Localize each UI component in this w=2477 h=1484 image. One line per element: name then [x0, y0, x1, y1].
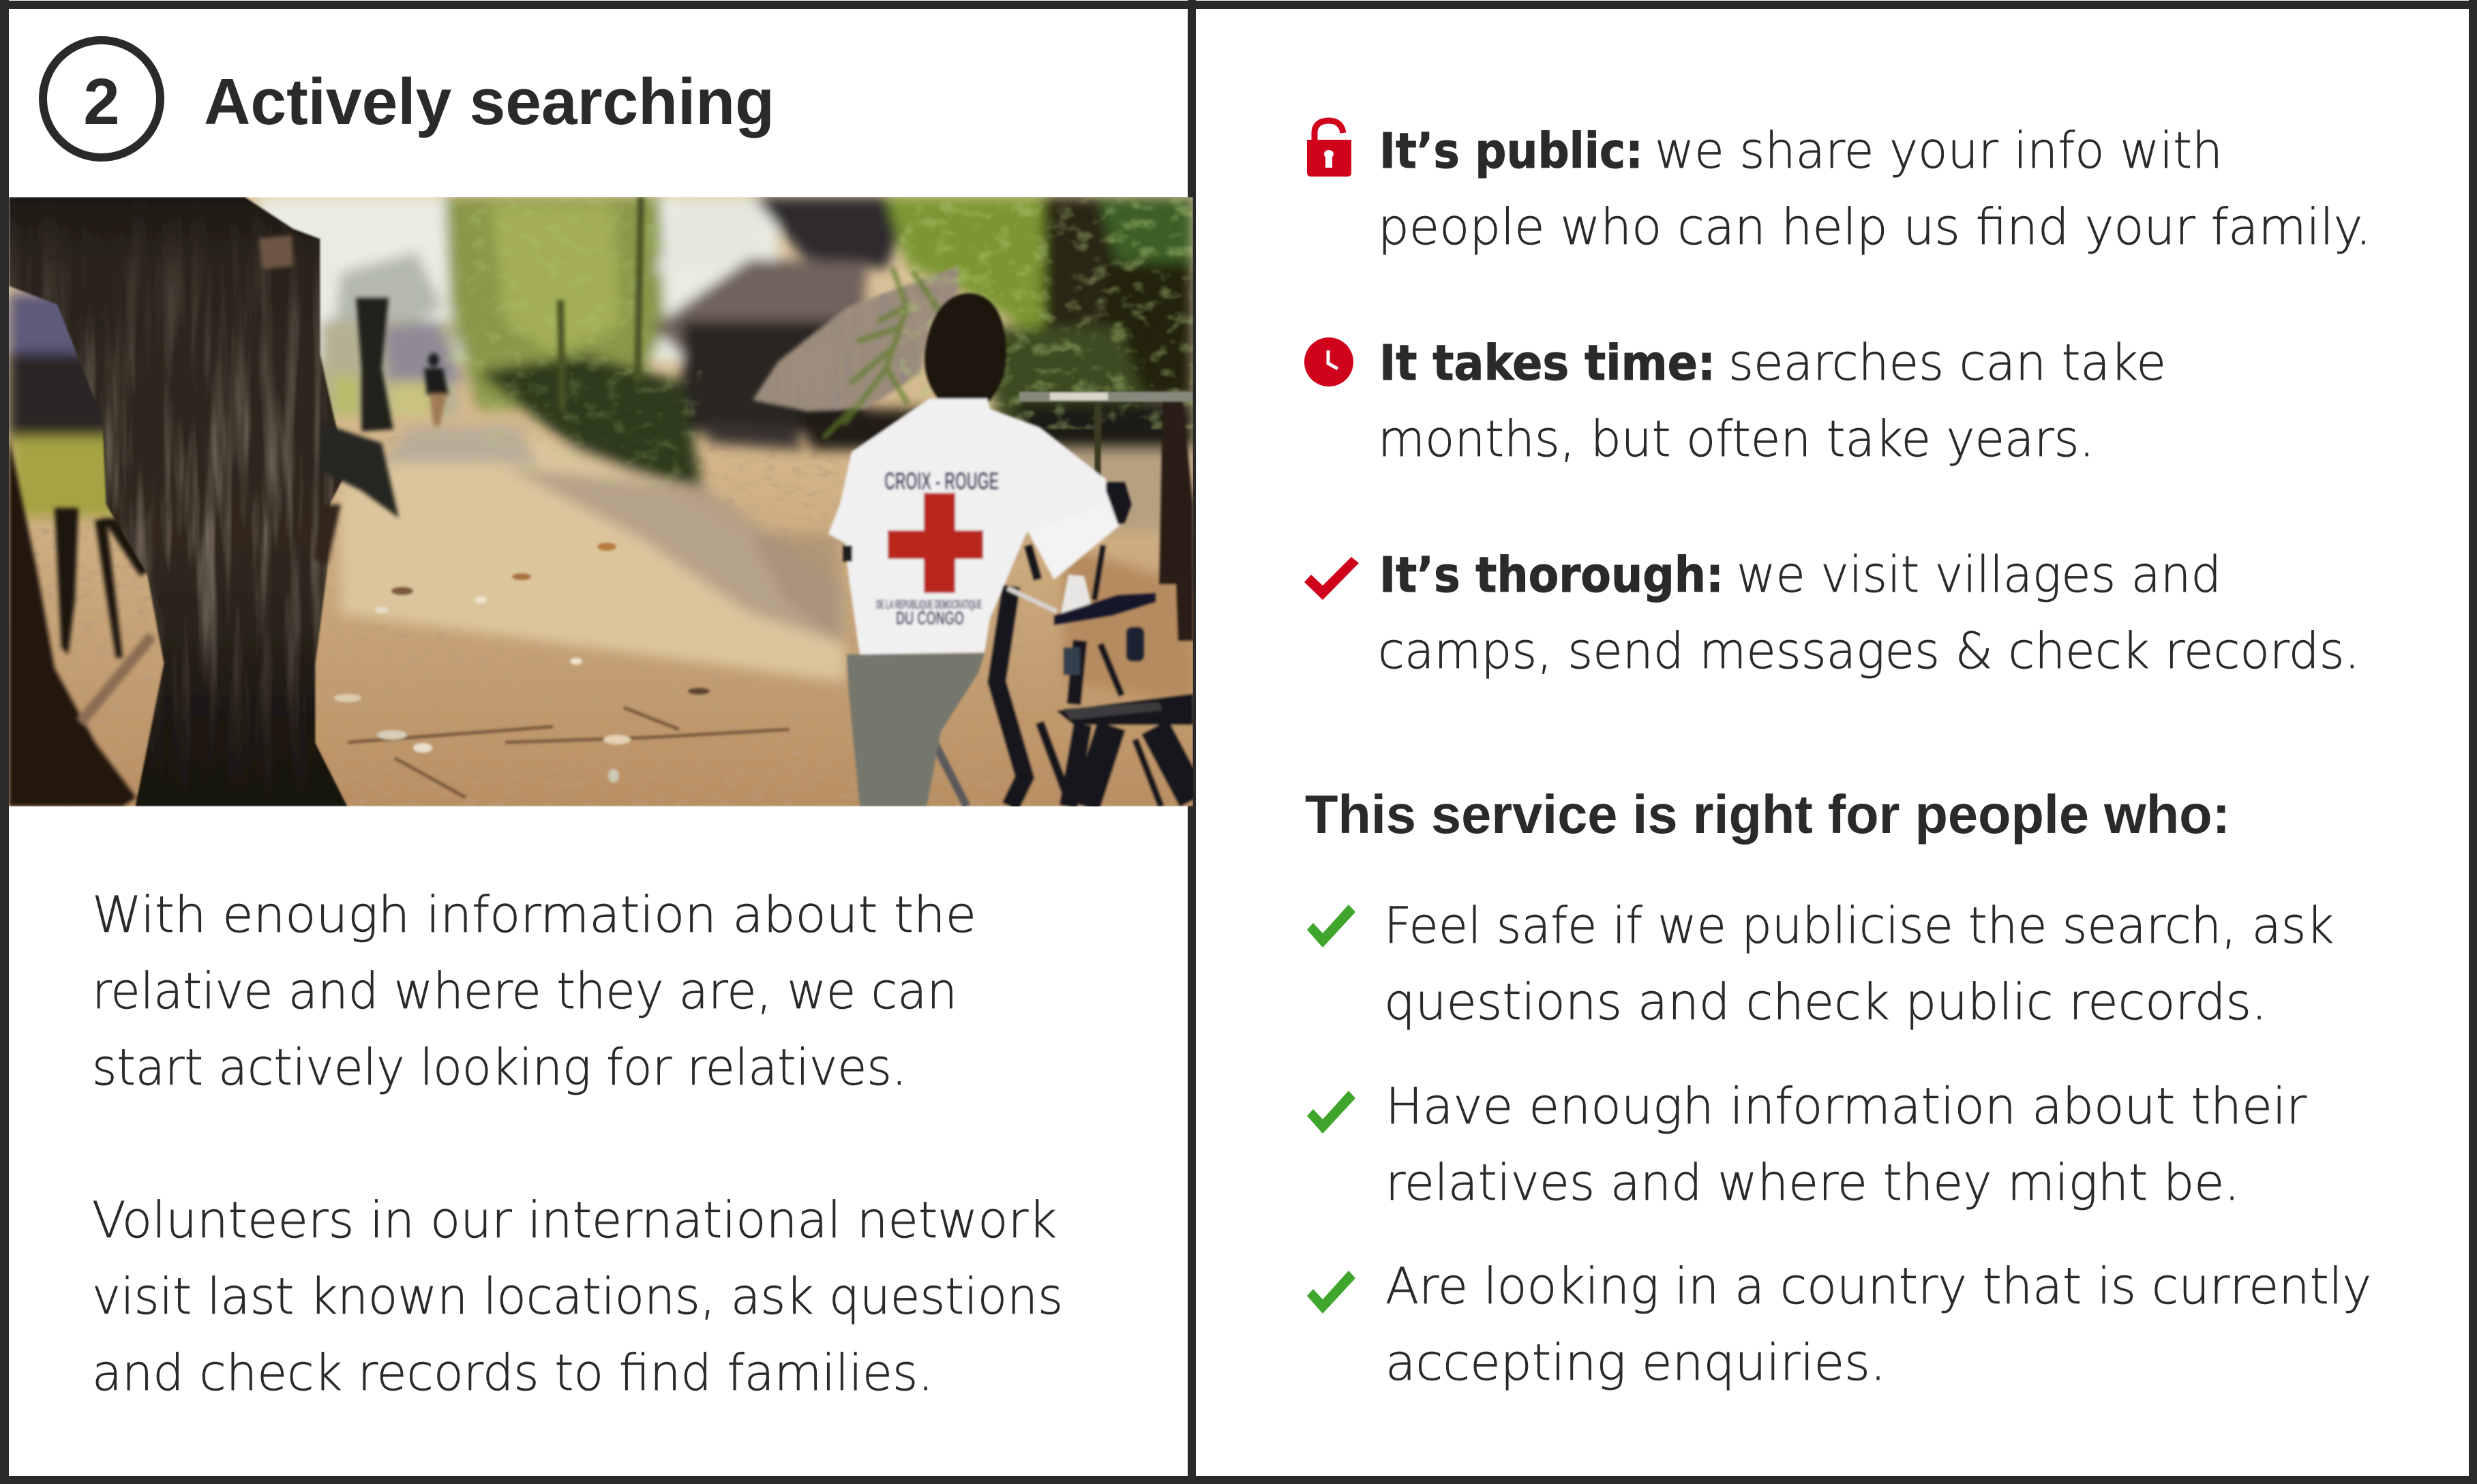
bush and stems — [560, 197, 641, 409]
criterion: feel safe: questions and check public records. — [1384, 973, 2267, 1031]
body text: intro paragraph: relative and where they are, we can — [92, 963, 957, 1020]
photo: volunteer with bicycle on a village path — [9, 197, 1193, 806]
feature: public: people who can help us find your family. — [1378, 198, 2371, 256]
pole — [1019, 392, 1193, 402]
feature: public: we share your info with — [1655, 122, 2223, 180]
heading: service is right for: This service is right for people who: — [1305, 784, 2230, 845]
criterion: enough information: Have enough information about their — [1385, 1078, 2307, 1136]
heading: number badge — [43, 40, 160, 157]
feature: public: It’s public: — [1379, 123, 1643, 179]
feature: takes time: searches can take — [1728, 334, 2166, 392]
body text: volunteers paragraph — [92, 1192, 1063, 1402]
feature: thorough: It’s thorough: — [1379, 547, 1724, 603]
criterion: country accepting enquiries: accepting enquiries. — [1385, 1334, 1886, 1392]
criterion: country accepting enquiries: Are looking in a country that is currently — [1385, 1258, 2371, 1316]
volunteer — [828, 293, 1132, 806]
volunteer: DU CONGO — [896, 607, 964, 629]
criterion: enough information: relatives and where they might be. — [1385, 1154, 2240, 1212]
main palm trunk — [9, 197, 348, 806]
icon: red check — [1304, 557, 1359, 600]
criterion: feel safe — [1307, 897, 2334, 1031]
icon: open padlock — [1307, 121, 1351, 177]
feature: thorough: we visit villages and — [1737, 546, 2221, 604]
small background tree — [356, 298, 393, 431]
body text: intro paragraph — [92, 886, 976, 1097]
feature: takes time: It takes time: — [1379, 335, 1715, 391]
body text: intro paragraph: start actively looking for relatives. — [92, 1039, 907, 1097]
criterion: country accepting enquiries — [1307, 1258, 2371, 1392]
fronds below palm — [55, 508, 153, 658]
far-left trunk — [9, 436, 136, 806]
heading: number badge: 2 — [83, 65, 120, 138]
criterion: feel safe: Feel safe if we publicise the search, ask — [1384, 897, 2334, 955]
icon: green check — [1307, 905, 1355, 948]
icon: green check — [1307, 1271, 1355, 1314]
panel: left — [9, 40, 1193, 1402]
thatch roof with frond overlay — [753, 266, 959, 411]
far walker — [424, 353, 449, 426]
feature: public — [1307, 121, 2371, 256]
heading: Actively searching: Actively searching — [204, 65, 775, 138]
ground debris — [334, 543, 790, 798]
body text: volunteers paragraph: and check records to find families. — [92, 1344, 933, 1402]
feature: thorough: camps, send messages & check records. — [1378, 622, 2360, 680]
feature: takes time: months, but often take years. — [1378, 410, 2095, 468]
criterion: enough information — [1307, 1078, 2307, 1212]
body text: volunteers paragraph: Volunteers in our international network — [92, 1192, 1057, 1250]
feature: takes time — [1304, 334, 2166, 468]
shirt lettering: CROIX - ROUGE — [884, 467, 999, 495]
right-hand tree and bicycle — [935, 402, 1193, 806]
body text: intro paragraph: With enough information about the — [92, 886, 976, 944]
icon: green check — [1307, 1091, 1355, 1134]
panel: right — [1304, 121, 2371, 1392]
volunteer: DE LA REPUBLIQUE DEMOCRATIQUE — [876, 598, 982, 611]
body text: volunteers paragraph: visit last known locations, ask questions — [92, 1268, 1063, 1326]
feature: thorough — [1304, 546, 2360, 680]
icon: clock — [1304, 337, 1353, 387]
